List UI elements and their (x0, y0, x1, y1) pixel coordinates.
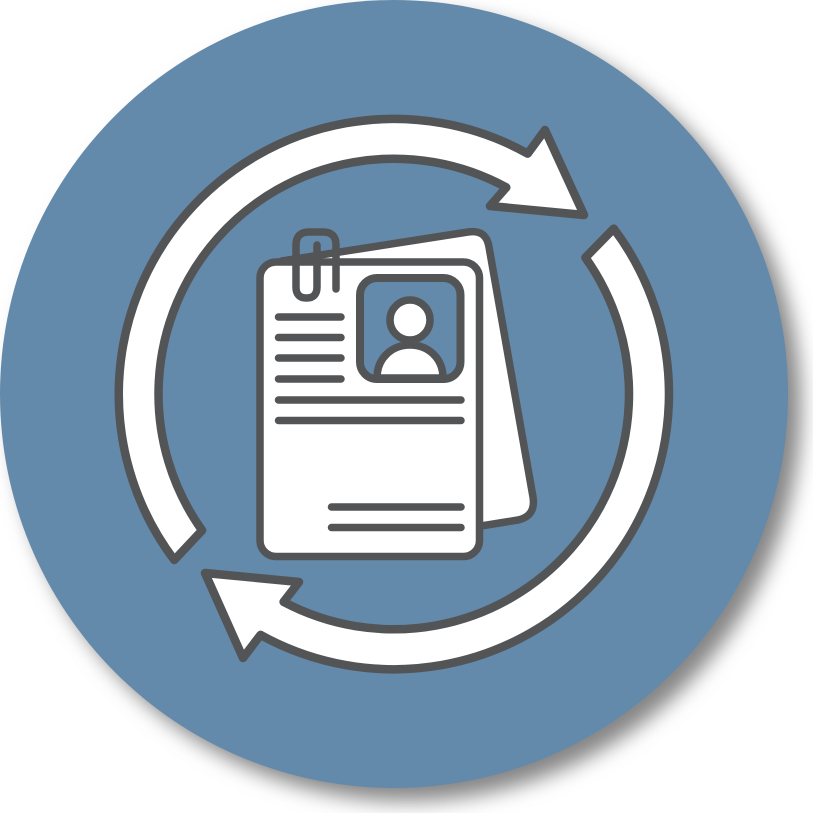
circular arrows (119, 119, 669, 669)
front sheet (260, 262, 480, 556)
arrow: top clockwise (119, 119, 584, 560)
text lines (278, 317, 461, 528)
arrow: bottom clockwise (205, 229, 669, 669)
icon: resume documents (260, 232, 533, 557)
person icon (377, 300, 443, 378)
back sheet (282, 232, 533, 526)
paperclip (296, 232, 336, 298)
photo frame (360, 278, 460, 379)
